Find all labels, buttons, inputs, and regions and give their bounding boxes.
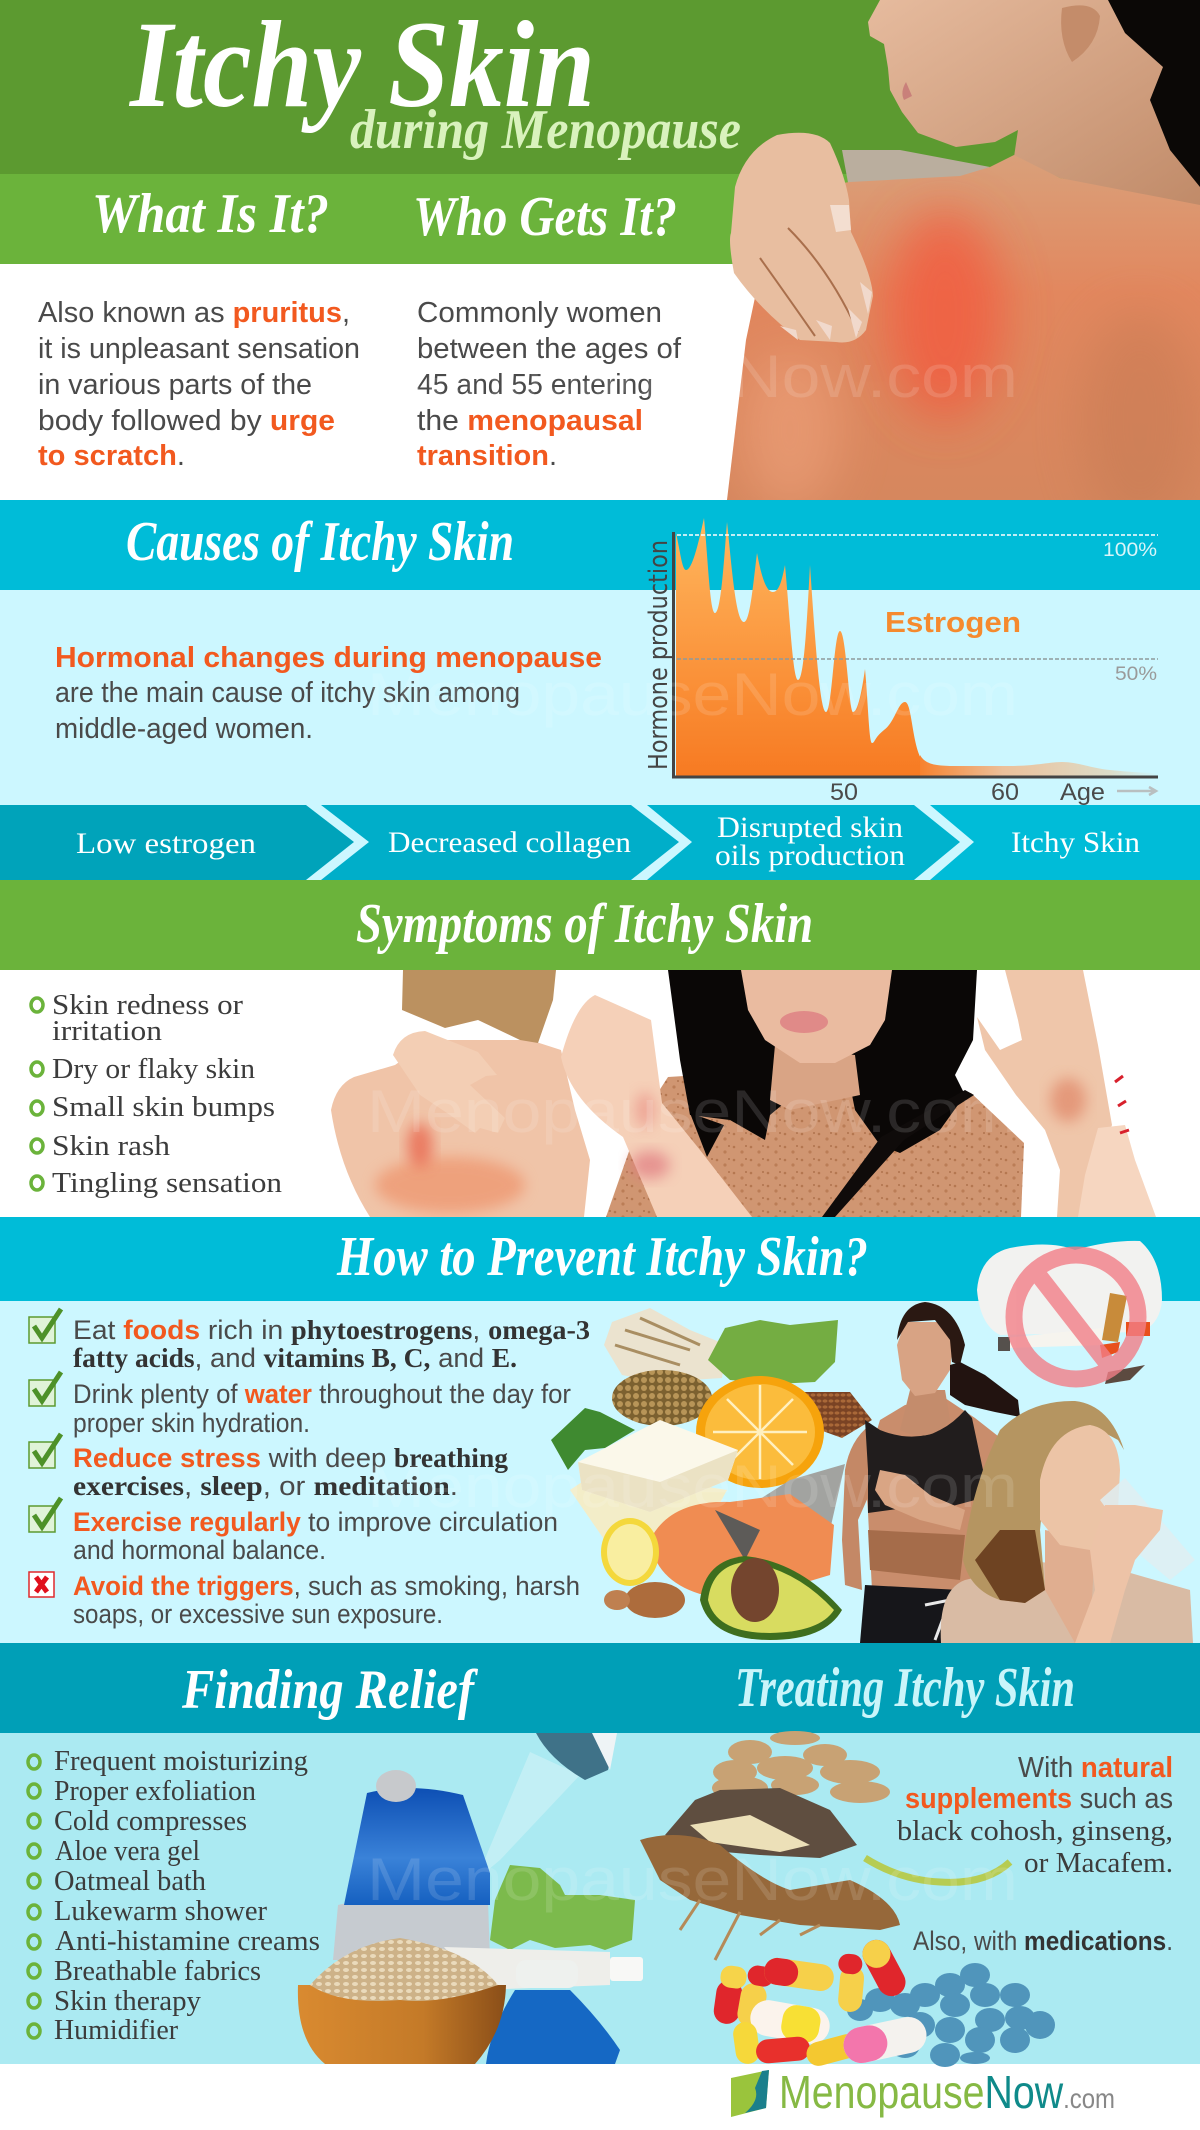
text block: who gets it: between the ages of: [417, 333, 682, 365]
list: symptoms: irritation: [52, 1015, 163, 1047]
heading: treating itchy skin: Treating Itchy Skin: [735, 1657, 1075, 1719]
hand on shoulder: [730, 133, 873, 342]
image: natural supplements: [640, 1731, 1010, 1960]
tip: triggers: Avoid the triggers, such as smoking, harsh: [73, 1571, 580, 1601]
heading: prevent: How to Prevent Itchy Skin?: [336, 1226, 868, 1288]
list: relief methods: Frequent moisturizing: [54, 1745, 308, 1777]
icon: red cross: [29, 1572, 54, 1597]
label: 50%: 50%: [1115, 664, 1157, 685]
tube: [444, 1947, 643, 1990]
watermarks: [367, 343, 1018, 1913]
checklist: prevention tips: [29, 1309, 590, 1629]
watermarks: MenopauseNow.com: [367, 1846, 1018, 1913]
panel: symptoms of itchy skin: [0, 880, 1200, 1217]
list: symptoms: [31, 989, 283, 1199]
text block: causes: Hormonal changes during menopause: [55, 642, 602, 674]
list: relief methods: Oatmeal bath: [54, 1865, 206, 1897]
text block: causes: are the main cause of itchy skin among: [55, 677, 520, 709]
icon: check: [29, 1309, 61, 1343]
photo: woman scratching red shoulder: [727, 0, 1200, 530]
heading: symptoms: Symptoms of Itchy Skin: [356, 893, 813, 955]
step: itchy skin: Itchy Skin: [1011, 826, 1140, 859]
list: symptoms: Skin redness or: [52, 989, 243, 1021]
text block: what is it: to scratch.: [38, 440, 185, 472]
image: woman drinking water: [941, 1401, 1195, 1643]
label: estrogen: Estrogen: [885, 607, 1021, 639]
text block: who gets it: the menopausal: [417, 405, 643, 437]
tip: water: [73, 1379, 571, 1438]
photos: women with irritated skin: [331, 970, 1156, 1217]
step: disrupted skin oils production: [715, 811, 905, 872]
photo: back with rash: [331, 970, 590, 1217]
step: disrupted skin oils production: oils production: [715, 839, 905, 872]
tip: stress: [73, 1443, 508, 1501]
flow: causes chain chevrons: [0, 805, 1200, 880]
watermarks: MenopauseNow.com: [367, 343, 1018, 410]
text block: who gets it: transition.: [417, 440, 557, 472]
area: estrogen level: [676, 518, 922, 776]
text block: what is it: it is unpleasant sensation: [38, 333, 360, 365]
photo: hand with red wrist: [977, 970, 1156, 1217]
image: healthy foods: [551, 1308, 872, 1640]
list: relief methods: Breathable fabrics: [54, 1955, 261, 1987]
list: relief methods: Lukewarm shower: [54, 1895, 267, 1927]
text block: natural supplements: or Macafem.: [1024, 1847, 1173, 1879]
list: symptoms: Tingling sensation: [52, 1167, 283, 1199]
axis labels: 50: [830, 779, 858, 806]
tip: triggers: [73, 1571, 580, 1629]
icon: check: [29, 1498, 61, 1532]
black cohosh herb: [665, 1788, 857, 1858]
image: no smoking pillow: [977, 1241, 1162, 1384]
list: relief methods: Anti-histamine creams: [55, 1925, 320, 1957]
icon: logo profile: [731, 2070, 769, 2117]
axis labels: [830, 779, 1105, 806]
capsules: [712, 1935, 930, 2069]
list: symptoms: Small skin bumps: [52, 1091, 275, 1123]
step: disrupted skin oils production: Disrupted skin: [717, 811, 903, 844]
text block: causes: [55, 642, 602, 745]
text block: natural supplements: black cohosh, ginseng,: [897, 1815, 1173, 1847]
axis labels: Age: [1060, 779, 1105, 806]
heading: what is it: What Is It?: [92, 183, 329, 245]
tip: exercise: and hormonal balance.: [73, 1535, 326, 1565]
tip: exercise: [73, 1507, 558, 1565]
list: symptoms: Skin rash: [52, 1130, 171, 1162]
tip: stress: Reduce stress with deep breathing: [73, 1443, 508, 1473]
list: relief methods: Proper exfoliation: [54, 1775, 256, 1807]
tablets: [712, 1731, 890, 1803]
text block: natural supplements: supplements such as: [905, 1783, 1173, 1815]
text block: who gets it: 45 and 55 entering: [417, 369, 653, 401]
text block: medications: Also, with medications.: [913, 1926, 1173, 1956]
oat bowl: [298, 1938, 506, 2064]
tip: foods: [73, 1315, 590, 1373]
panel: causes of itchy skin: [0, 500, 1200, 806]
list: relief methods: Humidifier: [54, 2014, 178, 2046]
text block: natural supplements: [897, 1752, 1173, 1879]
panel: title banner: [0, 0, 1200, 174]
list: relief methods: Aloe vera gel: [55, 1835, 200, 1867]
tip: stress: exercises , sleep, or meditation .: [73, 1471, 458, 1501]
text block: natural supplements: With natural: [1018, 1752, 1173, 1784]
list: symptoms: Dry or flaky skin: [52, 1053, 256, 1085]
tip: triggers: soaps, or excessive sun exposure.: [73, 1599, 443, 1629]
tip: foods: fatty acids, and vitamins B, C, and E.: [73, 1343, 517, 1373]
watermarks: MenopauseNow.com: [367, 661, 1018, 728]
image: woman running: [842, 1302, 1020, 1643]
step: low estrogen: Low estrogen: [76, 827, 256, 860]
ginseng root: [640, 1835, 900, 1960]
text block: causes: middle-aged women.: [55, 713, 313, 745]
image: pills: [712, 1935, 1055, 2069]
aloe vera: [490, 1865, 635, 1950]
logo: MenopauseNow.com: [731, 2066, 1115, 2118]
panel: what is it and who gets it: [0, 174, 1200, 500]
heading: causes: Causes of Itchy Skin: [126, 511, 514, 573]
icon: check: [29, 1434, 61, 1468]
icon: prohibition sign: [1014, 1255, 1138, 1379]
text block: what is it: Also known as pruritus,: [38, 297, 350, 329]
photo: raised arm with rash: [561, 995, 752, 1217]
heading: who gets it: Who Gets It?: [413, 186, 677, 248]
text block: what is it: in various parts of the: [38, 369, 312, 401]
watermarks: MenopauseNow.com: [367, 1453, 1018, 1520]
axis title: hormone production: Hormone production: [644, 540, 674, 770]
panel: how to prevent itchy skin: [0, 1217, 1200, 1643]
list: relief methods: Cold compresses: [54, 1805, 247, 1837]
photo: woman with freckled chest: [606, 970, 1024, 1217]
wordmark: MenopauseNow.com: [779, 2066, 1115, 2118]
axis labels: 60: [991, 779, 1019, 806]
list: relief methods: Skin therapy: [54, 1985, 201, 2017]
blue tablets: [847, 1963, 1055, 2067]
tip: foods: Eat foods rich in phytoestrogens , omega-3: [73, 1315, 590, 1345]
text block: who gets it: Commonly women: [417, 297, 662, 329]
image: relief products: [298, 1733, 643, 2064]
tip: exercise: Exercise regularly to improve circulation: [73, 1507, 558, 1537]
herb sprig: [865, 1858, 1010, 1882]
chart: estrogen decline with age: [644, 518, 1158, 806]
step: decreased collagen: Decreased collagen: [388, 826, 631, 859]
humidifier: [333, 1770, 490, 1960]
shower: [485, 1733, 617, 1870]
icon: check: [29, 1372, 61, 1406]
text block: what is it: [38, 297, 360, 472]
tip: water: proper skin hydration.: [73, 1408, 310, 1438]
tip: water: Drink plenty of water throughout the day for: [73, 1379, 571, 1409]
title: Itchy Skin: [128, 0, 595, 133]
ice pack: [486, 1986, 620, 2064]
watermarks: MenopauseNow.com: [367, 1078, 1018, 1145]
text block: what is it: body followed by urge: [38, 405, 335, 437]
text block: who gets it: [417, 297, 682, 472]
subtitle: during Menopause: [350, 99, 741, 161]
list: relief methods: [28, 1745, 320, 2046]
panel: finding relief and treating itchy skin: [0, 1643, 1200, 2069]
heading: finding relief: Finding Relief: [181, 1659, 479, 1721]
label: 100%: 100%: [1103, 540, 1157, 561]
arrow: age axis: [1117, 787, 1156, 795]
